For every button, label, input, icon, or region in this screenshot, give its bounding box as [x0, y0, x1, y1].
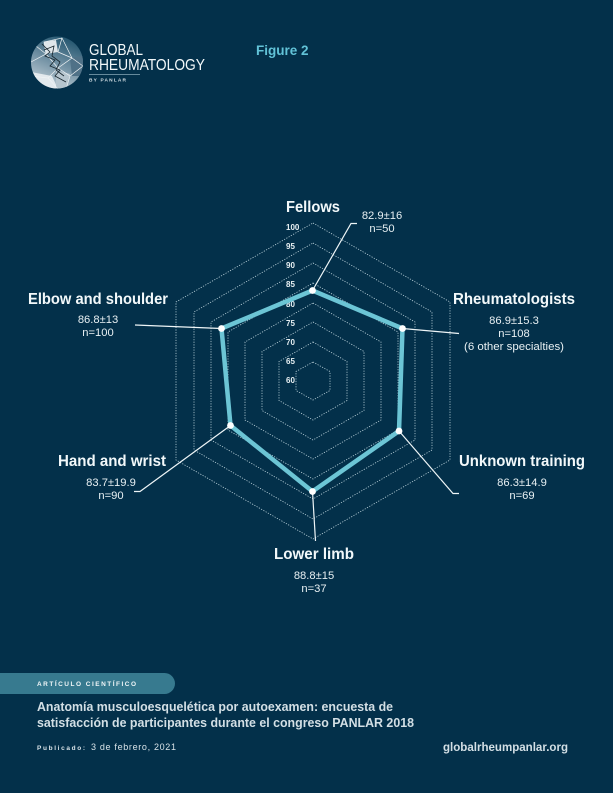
label: Elbow and shoulder [28, 291, 168, 339]
label: Unknown training: 86.3±14.9 [497, 477, 547, 489]
label: Lower limb: Lower limb [274, 546, 354, 563]
leader lines [134, 224, 459, 541]
label: Elbow and shoulder: Elbow and shoulder [28, 291, 168, 308]
axis tick labels: 95 [286, 242, 295, 251]
label: Hand and wrist: n=90 [98, 490, 124, 502]
label: Hand and wrist [58, 453, 167, 502]
figure label: Figure 2 [256, 43, 309, 58]
label: Lower limb [274, 546, 354, 595]
axis tick labels: 75 [286, 319, 295, 328]
label: Lower limb: 88.8±15 [294, 570, 334, 582]
label: Fellows: Fellows [286, 199, 340, 216]
label: Unknown training: Unknown training [459, 453, 585, 470]
footer [0, 673, 568, 754]
axis tick labels: 70 [286, 338, 295, 347]
radar grid [176, 223, 450, 539]
axis tick labels: 90 [286, 261, 295, 270]
label: Hand and wrist: Hand and wrist [58, 453, 167, 470]
publication date: Publicado: [37, 745, 85, 752]
label: Rheumatologists: 86.9±15.3 [489, 315, 539, 327]
data points [218, 287, 406, 495]
label: Hand and wrist: 83.7±19.9 [86, 477, 136, 489]
article type tag [0, 673, 175, 694]
label: Lower limb: n=37 [301, 583, 327, 595]
label: Fellows [286, 199, 402, 235]
website: globalrheumpanlar.org [443, 740, 568, 754]
logo wordmark [89, 42, 205, 84]
label: Fellows: n=50 [369, 223, 395, 235]
article title: satisfacción de participantes durante el congreso PANLAR 2018 [37, 716, 414, 730]
label: Fellows: 82.9±16 [362, 210, 402, 222]
radar chart [134, 223, 459, 541]
logo wordmark: BY PANLAR [89, 78, 127, 84]
axis tick labels: 60 [286, 376, 295, 385]
label: Elbow and shoulder: 86.8±13 [78, 314, 118, 326]
label: Unknown training [459, 453, 585, 502]
article title: Anatomía musculoesquelética por autoexamen: encuesta de [37, 700, 393, 714]
data polygon [222, 290, 402, 492]
article title [37, 700, 414, 730]
article type tag: ARTÍCULO CIENTÍFICO [37, 679, 136, 688]
axis tick labels: 85 [286, 280, 295, 289]
logo [31, 36, 205, 89]
label: Rheumatologists [453, 291, 575, 353]
axis tick labels: 100 [286, 223, 300, 232]
publication date: 3 de febrero, 2021 [91, 742, 176, 752]
label: Unknown training: n=69 [509, 490, 535, 502]
logo wordmark: RHEUMATOLOGY [89, 57, 205, 74]
axis tick labels: 65 [286, 357, 295, 366]
axis tick labels: 80 [286, 300, 295, 309]
label: Rheumatologists: Rheumatologists [453, 291, 575, 308]
label: Rheumatologists: n=108 [498, 328, 530, 340]
publication date [37, 742, 176, 752]
axis tick labels [286, 223, 300, 385]
icon: logo globe [31, 36, 83, 89]
label: Elbow and shoulder: n=100 [82, 327, 114, 339]
label: Rheumatologists: (6 other specialties) [464, 341, 564, 353]
logo wordmark: GLOBAL [89, 42, 143, 59]
